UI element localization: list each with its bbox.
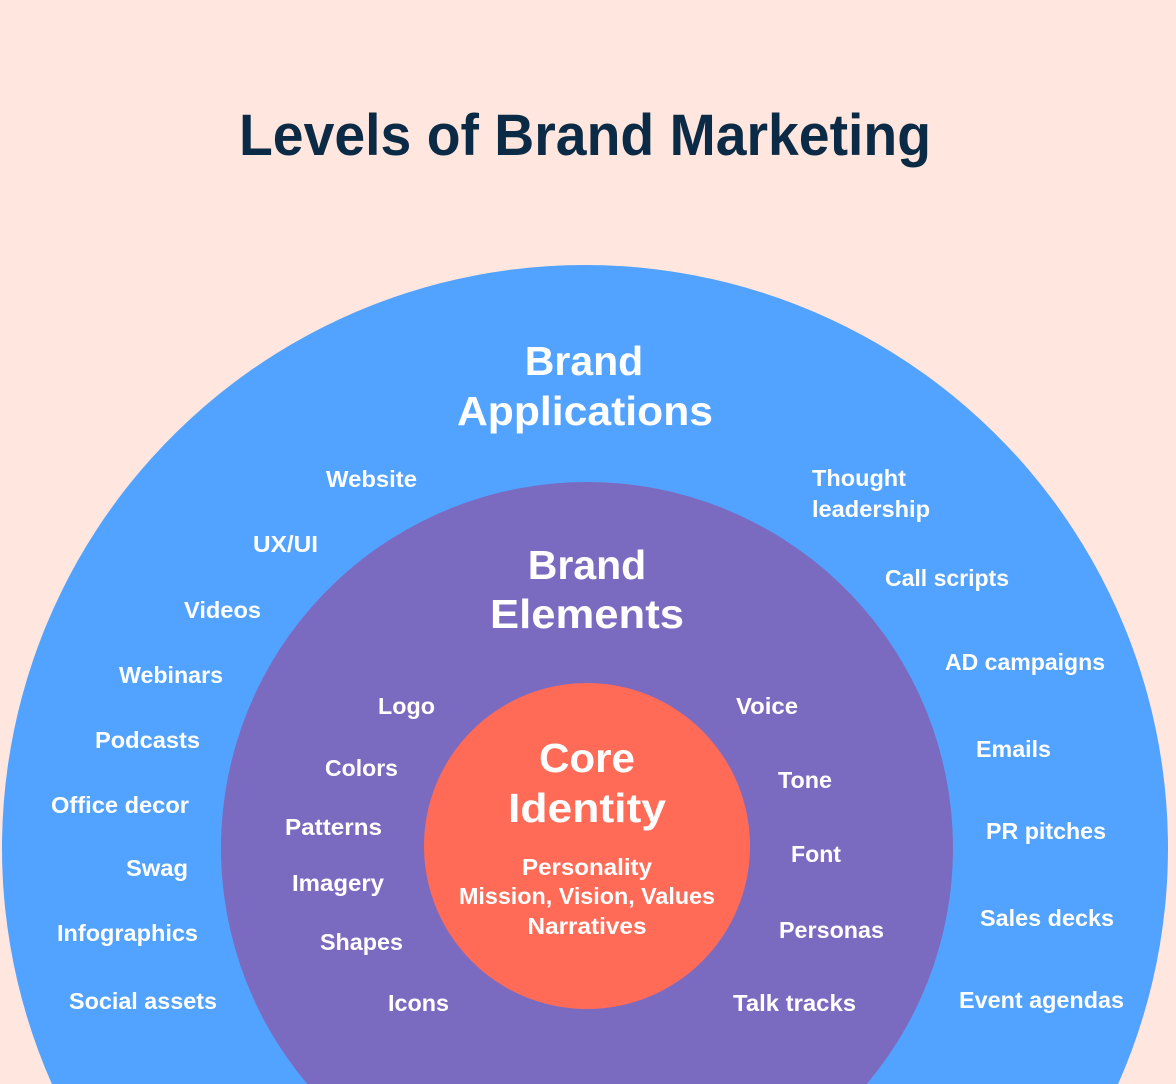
text block: application items right: Thought — [812, 465, 906, 491]
text block: element items right: Font — [791, 841, 841, 867]
text block: element items left — [285, 693, 449, 1016]
text block: element items right: Personas — [779, 917, 884, 943]
text block: application items left: Website — [326, 466, 417, 492]
text block: application items left: Videos — [184, 597, 261, 623]
heading: brand elements: Brand — [528, 542, 646, 588]
text block: application items right: Sales decks — [980, 905, 1114, 931]
text block: application items right: PR pitches — [986, 818, 1106, 844]
text block: application items left: Infographics — [57, 920, 198, 946]
heading: core identity: Identity — [508, 785, 666, 831]
text block: application items right — [812, 465, 1124, 1013]
text block: application items right: AD campaigns — [945, 649, 1105, 675]
text block: application items left: Swag — [126, 855, 188, 881]
text block: application items left: Podcasts — [95, 727, 200, 753]
text block: application items right: Call scripts — [885, 565, 1009, 591]
text block: application items left: UX/UI — [253, 531, 318, 557]
text block: element items left: Icons — [388, 990, 449, 1016]
text block: core items: Personality — [522, 854, 652, 880]
heading: core identity — [508, 735, 666, 831]
text block: element items right — [733, 693, 884, 1016]
panel: core identity — [424, 683, 750, 1009]
heading: brand elements — [490, 542, 684, 637]
text block: application items left: Webinars — [119, 662, 223, 688]
text block: element items left: Colors — [325, 755, 398, 781]
heading: core identity: Core — [539, 735, 635, 781]
text block: element items right: Talk tracks — [733, 990, 856, 1016]
text block: application items left — [51, 466, 417, 1014]
text block: application items right: leadership — [812, 496, 930, 522]
text block: application items right: Emails — [976, 736, 1051, 762]
text block: element items right: Tone — [778, 767, 832, 793]
title: Levels of Brand Marketing — [239, 103, 931, 168]
text block: element items left: Patterns — [285, 814, 382, 840]
text block: core items — [459, 854, 715, 939]
text block: application items left: Social assets — [69, 988, 217, 1014]
text block: core items: Narratives — [528, 913, 646, 939]
text block: application items right: Event agendas — [959, 987, 1124, 1013]
text block: element items left: Logo — [378, 693, 435, 719]
heading: brand applications: Brand — [525, 338, 643, 384]
heading: brand elements: Elements — [490, 591, 684, 637]
heading: brand applications: Applications — [457, 388, 713, 434]
text block: element items left: Imagery — [292, 870, 384, 896]
text block: core items: Mission, Vision, Values — [459, 883, 715, 909]
heading: brand applications — [457, 338, 713, 434]
panel: brand applications ring — [2, 265, 1168, 1084]
panel: brand elements ring — [221, 482, 953, 1084]
text block: element items left: Shapes — [320, 929, 403, 955]
text block: element items right: Voice — [736, 693, 798, 719]
text block: application items left: Office decor — [51, 792, 189, 818]
